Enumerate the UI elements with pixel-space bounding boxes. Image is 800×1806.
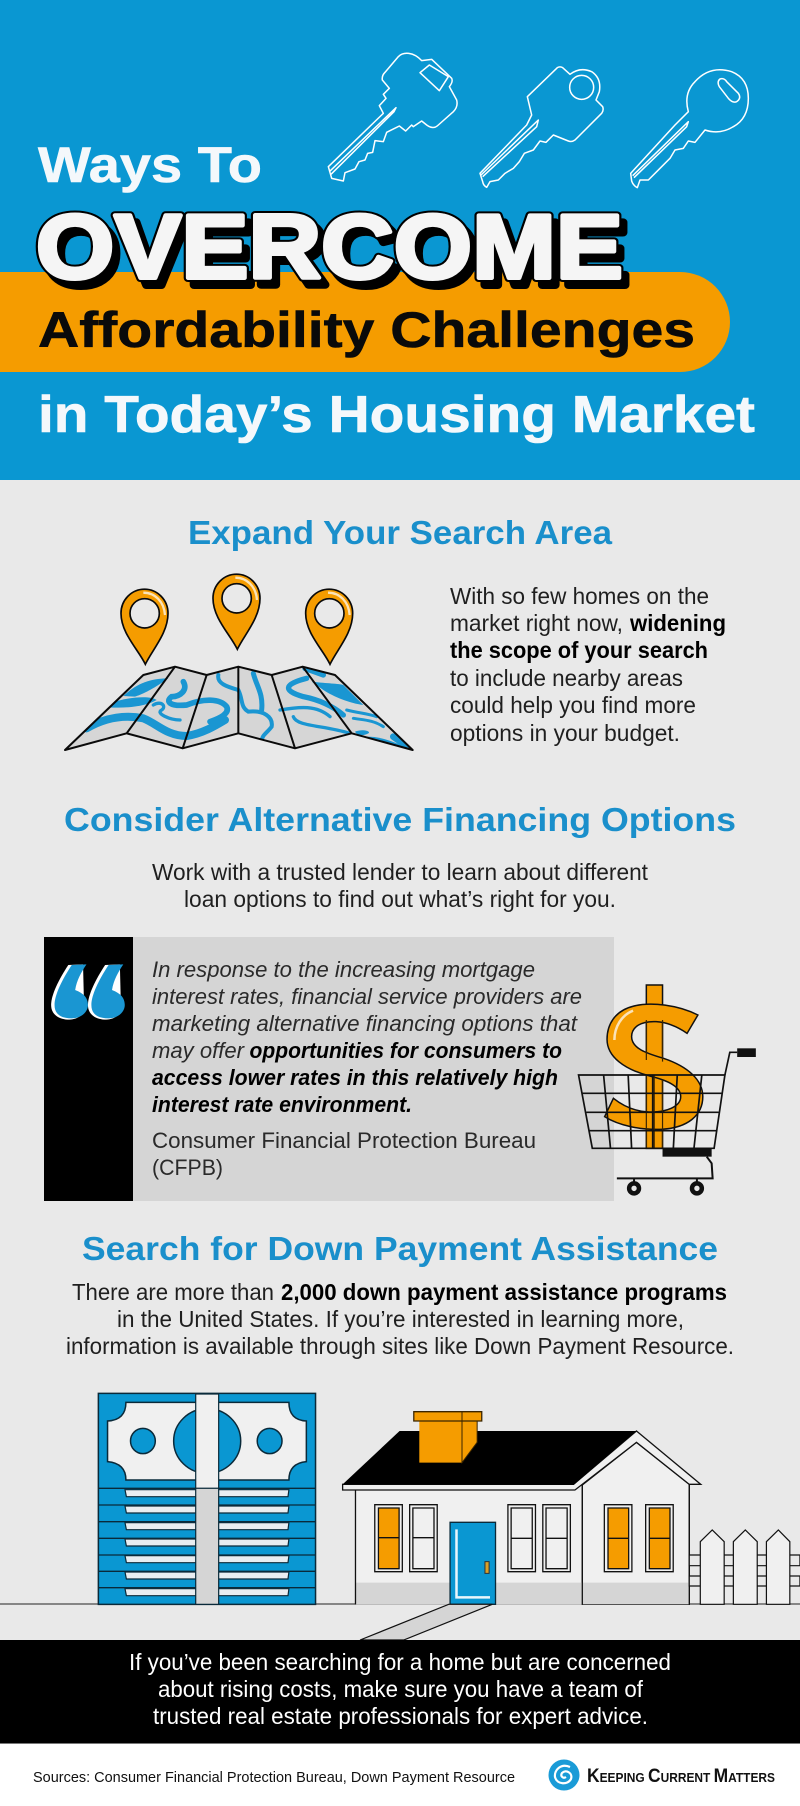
text block: expand search: to include nearby areas: [450, 665, 683, 691]
panel: closing message: about rising costs, make sure you have a team of: [158, 1676, 644, 1702]
icon: dollar in shopping cart: [579, 985, 756, 1193]
text block: assistance: in the United States. If you’re interested in learning more,: [117, 1306, 684, 1332]
icon: quotation marks: [51, 964, 125, 1020]
roof: [343, 1431, 636, 1485]
icon: logo swirl: [548, 1760, 580, 1790]
title: overcome: OVERCOME: [42, 204, 629, 305]
door: [450, 1522, 496, 1604]
quote text: interest rates, financial service providers are: [152, 984, 582, 1009]
sources: Sources: Consumer Financial Protection Bureau, Down Payment Resource: [33, 1770, 515, 1786]
quote attribution: (CFPB): [152, 1155, 223, 1180]
chimney: [414, 1412, 482, 1463]
footer: [0, 1743, 800, 1806]
title: overcome: OVERCOME: [36, 197, 623, 298]
text block: expand search: market right now,: [450, 610, 623, 636]
section 3 heading: Search for Down Payment Assistance: [82, 1230, 718, 1267]
icon: pin 3: [306, 589, 353, 664]
quote attribution: [152, 1128, 536, 1180]
text block: assistance: There are more than: [72, 1279, 274, 1305]
orange band: [0, 272, 730, 372]
title: housing market: in Today’s Housing Market: [38, 386, 755, 444]
text block: assistance: [66, 1279, 734, 1359]
header banner: [0, 0, 800, 480]
icon: third key: [631, 70, 748, 188]
text block: expand search: [450, 583, 726, 746]
text block: lender: Work with a trusted lender to learn about different: [152, 859, 649, 885]
icon: map with pins: [65, 574, 413, 750]
text block: expand search: With so few homes on the: [450, 583, 709, 609]
text block: assistance: information is available through sites like Down Payment Resource.: [66, 1333, 734, 1359]
section 1 heading: Expand Your Search Area: [188, 514, 613, 551]
front path: [360, 1604, 492, 1640]
icon: second key: [480, 67, 603, 187]
quote text: In response to the increasing mortgage: [152, 957, 535, 982]
quote attribution: Consumer Financial Protection Bureau: [152, 1128, 536, 1153]
title: affordability challenges: Affordability Challenges: [38, 302, 695, 358]
quote text: interest rate environment.: [152, 1092, 412, 1117]
quote text: [152, 957, 582, 1117]
text block: expand search: widening: [629, 610, 726, 636]
icon: pin 1: [121, 589, 168, 664]
text block: expand search: options in your budget.: [450, 720, 680, 746]
icon: first key: [328, 53, 457, 181]
panel: closing message: If you’ve been searching for a home but are concerned: [129, 1649, 671, 1675]
panel: quote: [44, 937, 614, 1201]
icon: pin 2: [213, 574, 260, 649]
section 2 heading: Consider Alternative Financing Options: [64, 801, 736, 838]
quote text: may offer: [152, 1038, 246, 1063]
quote text: opportunities for consumers to: [250, 1038, 562, 1063]
panel: closing message: [0, 1640, 800, 1743]
ground line: [0, 1603, 800, 1605]
logo wordmark: KEEPING CURRENT MATTERS: [587, 1766, 775, 1787]
text block: lender: loan options to find out what’s right for you.: [184, 886, 616, 912]
text block: expand search: the scope of your search: [450, 637, 708, 663]
quote text: access lower rates in this relatively high: [152, 1065, 558, 1090]
text block: lender: [152, 859, 649, 912]
text block: expand search: could help you find more: [450, 692, 696, 718]
icon: house: [343, 1412, 800, 1640]
title: overcome: OVERCOME: [36, 197, 623, 298]
quote text: marketing alternative financing options that: [152, 1011, 578, 1036]
windows: [375, 1505, 673, 1572]
fence: [689, 1530, 800, 1604]
text block: assistance: 2,000 down payment assistance programs: [281, 1279, 727, 1305]
panel: closing message: trusted real estate professionals for expert advice.: [153, 1703, 648, 1729]
title: ways to: Ways To: [38, 137, 262, 193]
icon: money stack: [98, 1393, 316, 1604]
